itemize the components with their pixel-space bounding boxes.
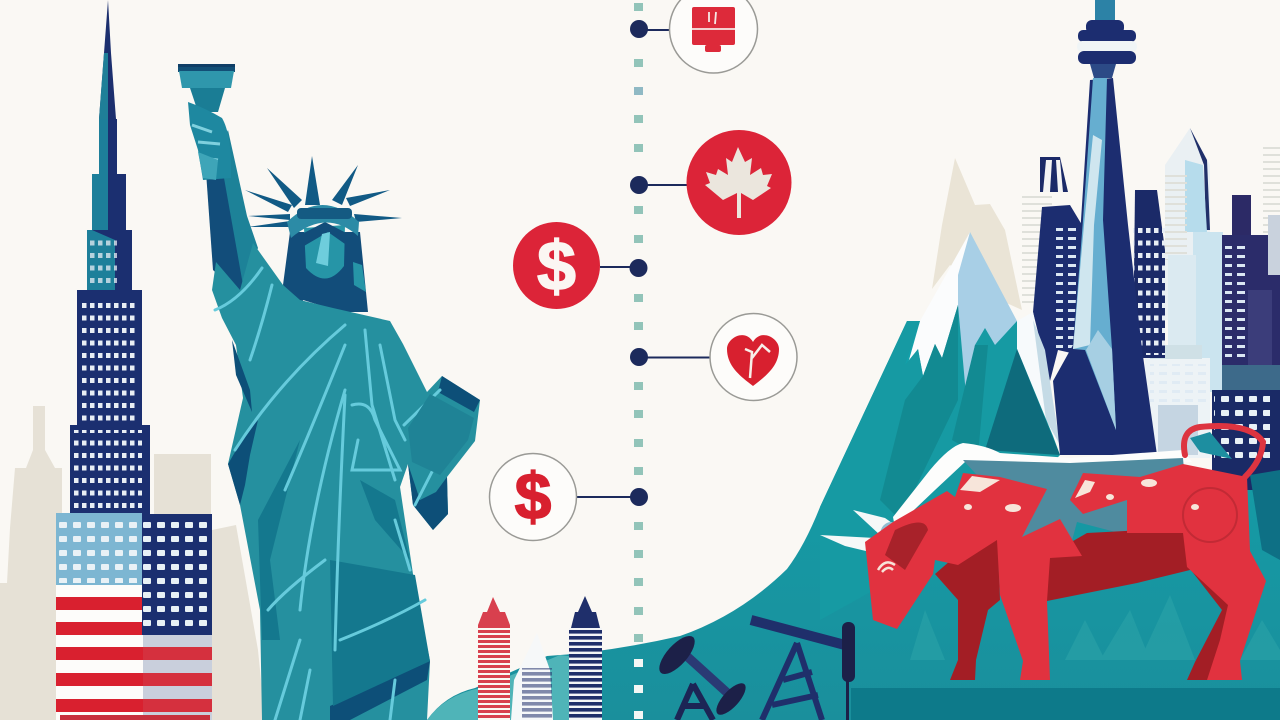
face — [304, 225, 345, 279]
white back highlight — [893, 443, 1192, 528]
icon circle: outlined dollar: $ — [515, 459, 551, 533]
statue of liberty — [178, 64, 480, 720]
skyline pale blue blocks — [1168, 232, 1223, 392]
tail loop — [1184, 426, 1263, 477]
snow left slope — [907, 232, 970, 376]
flag base right — [142, 514, 212, 635]
connector: outlined dollar node — [577, 488, 648, 506]
background beige skyline left — [0, 406, 265, 720]
connector: dollar node — [600, 259, 648, 277]
bull highlights — [960, 476, 1199, 512]
rear body — [1070, 464, 1266, 680]
left skyscraper — [56, 0, 212, 720]
eye — [878, 562, 895, 572]
pale striped building behind — [1022, 196, 1052, 304]
left oil pump — [654, 630, 750, 720]
horns — [853, 510, 902, 548]
tower shaft light — [1073, 78, 1116, 430]
small red tower — [478, 597, 510, 720]
nose — [316, 232, 330, 266]
teal mountain — [820, 305, 1060, 620]
background jagged trees — [910, 595, 1280, 660]
rays of crown — [245, 156, 402, 227]
small white tower — [511, 633, 553, 720]
lower tier — [70, 425, 150, 515]
navy curved building — [1033, 157, 1082, 381]
CN tower — [1053, 0, 1157, 455]
navy building right of tower — [1133, 190, 1165, 358]
tablet — [408, 394, 474, 475]
snow right slope — [1017, 312, 1060, 445]
right oil pump — [751, 620, 855, 720]
beige mountain — [932, 158, 1022, 310]
skyline pale tower — [1165, 128, 1210, 320]
bull — [820, 426, 1266, 680]
middle tier — [77, 290, 142, 425]
hair lock — [353, 262, 366, 292]
icon circle: heart — [710, 314, 797, 400]
tower shaft navy — [1053, 78, 1157, 455]
teal hill ground — [427, 321, 1280, 720]
spire — [99, 0, 116, 119]
robe shadows — [228, 340, 480, 720]
ground bar — [851, 688, 1280, 720]
icon circle: dollar: $ — [537, 227, 576, 305]
torch — [178, 64, 235, 112]
lower timeline dots — [634, 659, 643, 719]
raised arm — [188, 102, 258, 295]
robe fold highlights — [215, 268, 440, 720]
flag base left — [56, 513, 142, 585]
right far pale tower — [1263, 142, 1280, 242]
navy window block — [1212, 390, 1280, 490]
dark teal behind bull rump — [1250, 470, 1280, 560]
hair — [283, 232, 368, 312]
white low-rise — [1145, 345, 1210, 458]
pale hill behind small buildings — [427, 655, 600, 720]
dark rear leg — [1187, 565, 1235, 680]
blue ice mountain peak — [907, 232, 1060, 445]
icon circle: outlined dollar — [490, 454, 576, 540]
eye shadow — [300, 222, 352, 246]
dark neck and front leg — [935, 520, 1000, 680]
dark belly — [1047, 528, 1190, 601]
icon circle: briefcase — [670, 0, 758, 73]
connector: briefcase node — [630, 20, 669, 38]
tail inner teal — [1190, 432, 1232, 459]
pod — [1095, 0, 1115, 20]
icon circle: maple leaf — [686, 130, 792, 235]
grey back patch — [963, 458, 1185, 548]
haunch ring — [1183, 488, 1237, 542]
head shadow — [885, 522, 928, 570]
icon circle: dollar — [513, 222, 600, 309]
connector: heart node — [630, 348, 711, 366]
front body and head — [865, 473, 1082, 680]
robe — [212, 243, 480, 720]
small navy tower — [569, 596, 602, 720]
purple towers — [1222, 195, 1280, 395]
upper tiers — [87, 119, 132, 290]
central dotted timeline — [634, 3, 643, 642]
connector: maple leaf node — [630, 176, 688, 194]
crown band — [287, 205, 359, 238]
